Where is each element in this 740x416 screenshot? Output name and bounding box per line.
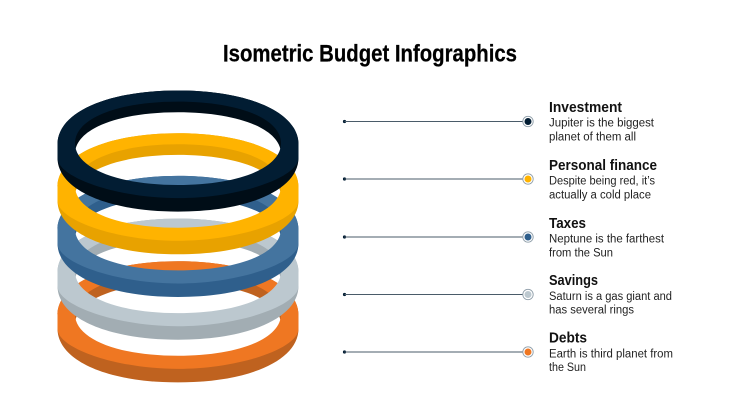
label: investment xyxy=(549,100,655,144)
connector line: taxes xyxy=(343,235,523,239)
label: personal finance: Despite being red, it’s xyxy=(549,176,655,188)
item: savings xyxy=(343,273,672,316)
label: investment: Jupiter is the biggest xyxy=(549,118,655,130)
label: personal finance xyxy=(549,158,657,202)
label: savings xyxy=(549,273,672,316)
label: taxes: Neptune is the farthest xyxy=(549,234,665,246)
marker: debts xyxy=(523,347,533,357)
label: personal finance: Personal finance xyxy=(549,158,657,174)
ring: investment (navy) xyxy=(58,90,298,212)
item: taxes xyxy=(343,216,665,260)
label: investment: Investment xyxy=(549,100,622,116)
connector line: savings xyxy=(343,293,523,296)
label: savings: has several rings xyxy=(549,304,634,316)
label: debts: Earth is third planet from xyxy=(549,348,673,360)
ring: debts (orange) xyxy=(58,261,298,382)
connector line: debts xyxy=(343,350,523,354)
ring: savings (gray) xyxy=(58,219,298,340)
ring: personal finance (yellow) xyxy=(58,133,298,254)
item: debts xyxy=(343,331,673,374)
label: debts xyxy=(549,331,673,374)
connector line: investment xyxy=(343,120,523,123)
marker: personal finance xyxy=(523,174,533,184)
marker: taxes xyxy=(523,232,533,242)
item: investment xyxy=(343,100,655,144)
item: personal finance xyxy=(343,158,657,202)
label: debts: the Sun xyxy=(549,362,586,374)
marker: savings xyxy=(523,289,533,300)
title: Isometric Budget Infographics xyxy=(223,41,517,68)
label: taxes: from the Sun xyxy=(549,248,613,260)
label: savings: Savings xyxy=(549,273,598,289)
label: investment: planet of them all xyxy=(549,132,636,144)
stacked rings chart xyxy=(58,90,298,382)
label: savings: Saturn is a gas giant and xyxy=(549,291,672,303)
label: taxes: Taxes xyxy=(549,216,586,232)
connector line: personal finance xyxy=(343,177,523,181)
label: personal finance: actually a cold place xyxy=(549,190,651,202)
label: debts: Debts xyxy=(549,331,587,347)
ring: taxes (blue) xyxy=(58,176,298,297)
label: taxes xyxy=(549,216,665,260)
marker: investment xyxy=(523,116,533,127)
